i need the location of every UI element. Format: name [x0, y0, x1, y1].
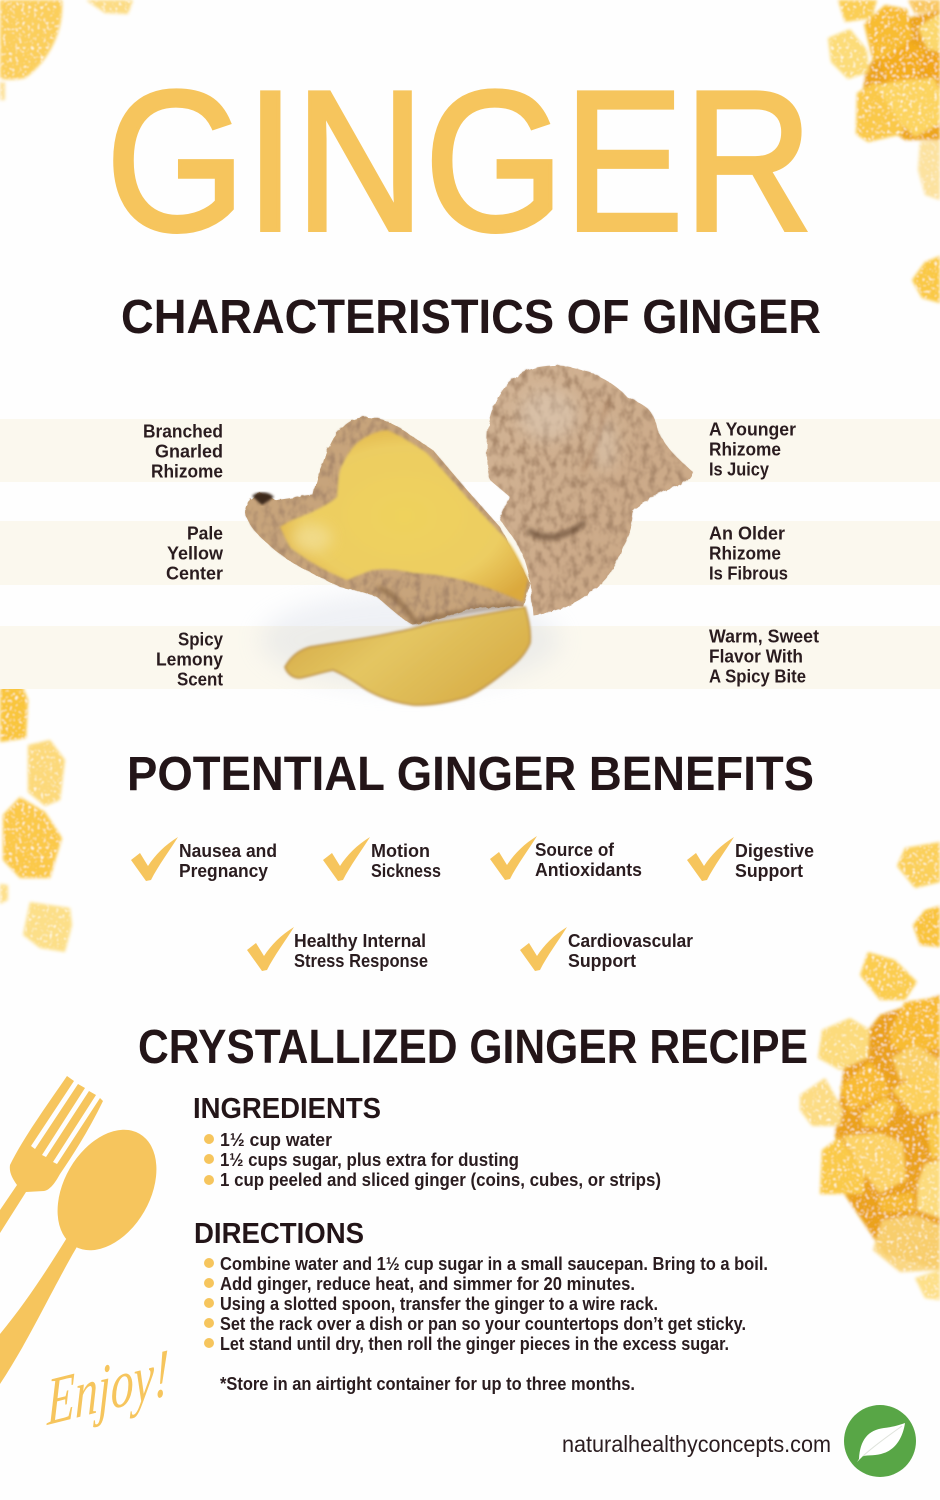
benefit labels: Cardiovascular: [568, 930, 693, 951]
characteristics: left labels: Lemony: [156, 648, 224, 670]
characteristics: right labels: Is Fibrous: [709, 562, 788, 584]
directions list: Combine water and 1½ cup sugar in a small saucepan. Bring to a boil.: [220, 1253, 768, 1274]
characteristics: right labels: Rhizome: [709, 438, 781, 460]
benefit labels: Pregnancy: [179, 860, 269, 881]
characteristics: right labels: Rhizome: [709, 542, 781, 564]
ingredients list: 1 cup peeled and sliced ginger (coins, cubes, or strips): [220, 1169, 661, 1190]
title: GINGER: [106, 50, 813, 273]
benefit labels: Sickness: [371, 860, 441, 881]
characteristics: right labels: A Spicy Bite: [709, 666, 806, 686]
heading: ingredients: INGREDIENTS: [193, 1093, 381, 1125]
ingredients list: 1½ cup water: [220, 1129, 332, 1150]
characteristics: left labels: Rhizome: [151, 460, 223, 482]
characteristics: right labels: Warm, Sweet: [709, 626, 819, 646]
characteristics: left labels: Gnarled: [155, 440, 223, 462]
heading: directions: DIRECTIONS: [194, 1218, 364, 1250]
benefit labels: [179, 839, 814, 971]
directions list: Using a slotted spoon, transfer the ginger to a wire rack.: [220, 1293, 658, 1314]
candied ginger: top right cluster: [828, 0, 940, 303]
candied ginger: top left cluster: [0, 0, 133, 100]
characteristics: left labels: Spicy: [178, 628, 224, 650]
candied ginger: lower right cluster: [800, 842, 940, 1300]
characteristics: right labels: [709, 418, 819, 686]
directions list: Let stand until dry, then roll the ginger pieces in the excess sugar.: [220, 1333, 729, 1354]
characteristic bands: [0, 419, 940, 689]
website: naturalhealthyconcepts.com: [562, 1431, 831, 1457]
ginger root photo: [245, 366, 693, 705]
heading: benefits: POTENTIAL GINGER BENEFITS: [127, 748, 814, 801]
benefit labels: Antioxidants: [535, 859, 642, 880]
candied ginger: left cluster: [0, 676, 72, 952]
characteristics: left labels: Branched: [143, 420, 223, 442]
storage note: *Store in an airtight container for up to three months.: [220, 1373, 635, 1394]
heading: characteristics: CHARACTERISTICS OF GINGER: [121, 291, 821, 344]
directions list: Set the rack over a dish or pan so your countertops don’t get sticky.: [220, 1313, 746, 1334]
heading: recipe: CRYSTALLIZED GINGER RECIPE: [138, 1021, 808, 1074]
characteristics: left labels: [143, 420, 224, 690]
benefit labels: Healthy Internal: [294, 930, 426, 951]
benefit labels: Support: [568, 950, 636, 971]
icon: fork and spoon: [0, 1076, 177, 1384]
directions list: [204, 1253, 768, 1354]
directions list: Add ginger, reduce heat, and simmer for 20 minutes.: [220, 1273, 635, 1294]
benefit checkmarks: [131, 836, 734, 971]
characteristics: right labels: Flavor With: [709, 646, 803, 666]
benefit labels: Source of: [535, 839, 615, 860]
characteristics: left labels: Pale: [187, 522, 223, 544]
characteristics: right labels: An Older: [709, 522, 785, 544]
characteristics: left labels: Center: [166, 562, 223, 584]
characteristics: left labels: Scent: [177, 668, 223, 690]
characteristics: left labels: Yellow: [167, 542, 224, 564]
logo: leaf: [844, 1405, 916, 1477]
benefit labels: Stress Response: [294, 950, 428, 971]
benefit labels: Motion: [371, 840, 430, 861]
ingredients list: [204, 1129, 661, 1190]
benefit labels: Digestive: [735, 840, 814, 861]
characteristics: right labels: Is Juicy: [709, 458, 770, 480]
benefit labels: Support: [735, 860, 803, 881]
benefit labels: Nausea and: [179, 840, 277, 861]
enjoy script: Enjoy!: [46, 1335, 169, 1440]
characteristics: right labels: A Younger: [709, 418, 796, 440]
ingredients list: 1½ cups sugar, plus extra for dusting: [220, 1149, 519, 1170]
